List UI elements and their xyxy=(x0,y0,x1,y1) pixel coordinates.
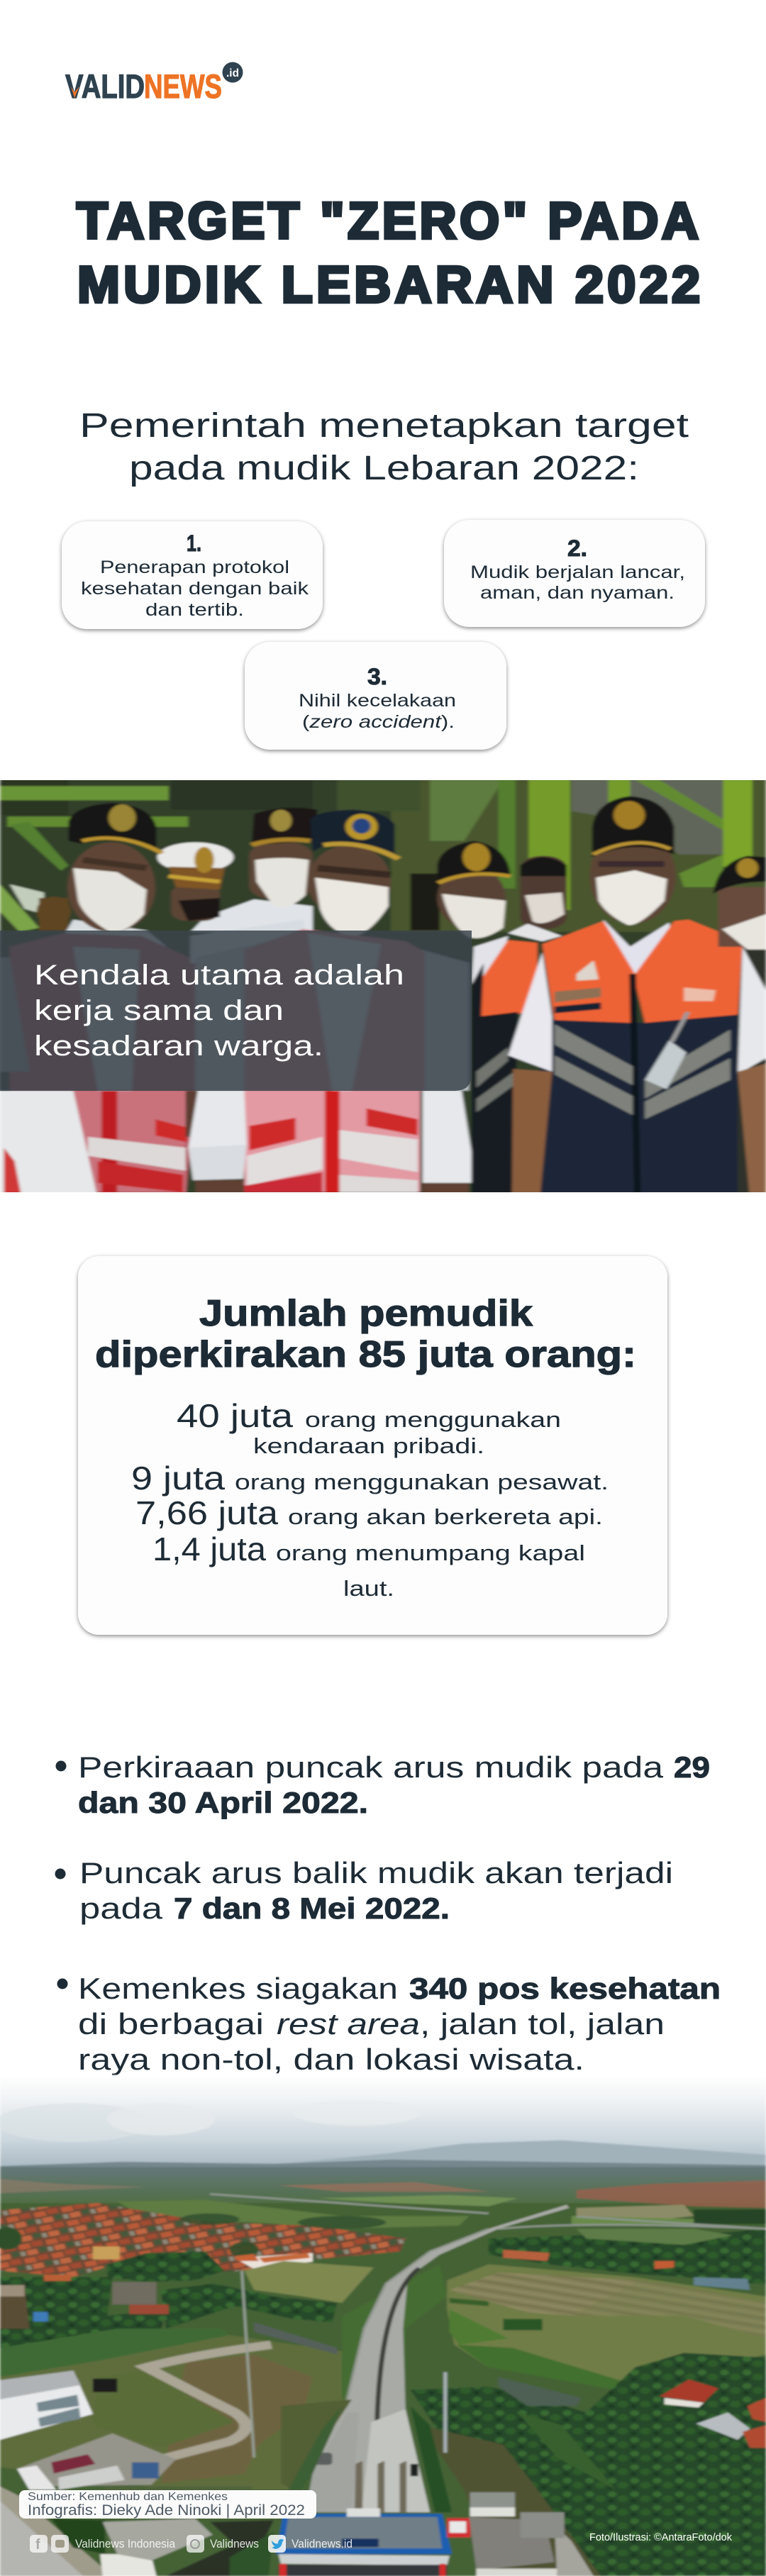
heading xyxy=(95,1293,636,1375)
white building xyxy=(0,2370,117,2440)
stat: 40 juta: 40 juta xyxy=(177,1397,293,1434)
social links: Validnews.id xyxy=(292,2537,353,2550)
bullet: puncak arus mudik: 29 xyxy=(674,1750,710,1784)
stat: 40 juta xyxy=(177,1397,561,1458)
icon: facebook: f xyxy=(35,2537,40,2553)
bullet: puncak arus balik: Puncak arus balik mudik akan terjadi xyxy=(79,1856,673,1889)
stat: 7,66 juta: orang akan berkereta api. xyxy=(288,1504,603,1529)
logo: Validnews.id: VALID xyxy=(65,67,145,105)
houses xyxy=(660,2380,718,2403)
stat: 1,4 juta: orang menumpang kapal xyxy=(276,1540,585,1565)
bullet: puncak arus balik xyxy=(55,1856,673,1925)
stat: 40 juta: orang menggunakan xyxy=(305,1407,561,1432)
back officer xyxy=(191,808,318,933)
lower left xyxy=(0,2487,274,2576)
subtitle xyxy=(79,407,689,487)
stat: 1,4 juta: laut. xyxy=(343,1576,394,1601)
panel: target 1: kesehatan dengan baik xyxy=(81,579,309,599)
stat: 9 juta xyxy=(131,1460,609,1497)
icon: instagram xyxy=(187,2535,204,2553)
bullet: pos kesehatan: raya non-tol, dan lokasi wisata. xyxy=(78,2043,584,2076)
stat: 1,4 juta: 1,4 juta xyxy=(152,1531,266,1567)
social links: Validnews Indonesia xyxy=(75,2537,175,2550)
bullet: puncak arus mudik: Perkiraaan puncak arus mudik pada xyxy=(78,1750,664,1784)
panel: target 1: dan tertib. xyxy=(145,600,244,620)
bullet: pos kesehatan xyxy=(57,1972,721,2076)
caption overlay xyxy=(0,931,472,1091)
panel: jumlah pemudik xyxy=(78,1256,667,1635)
vehicles xyxy=(17,2454,159,2489)
title: MUDIK LEBARAN 2022 xyxy=(77,257,700,313)
title xyxy=(77,193,700,313)
stat: 7,66 juta xyxy=(135,1494,603,1531)
forest lower right xyxy=(411,2353,766,2576)
stat: 40 juta: kendaraan pribadi. xyxy=(253,1433,484,1458)
white cap officer xyxy=(157,843,233,921)
logo: Validnews.id xyxy=(65,62,243,105)
subtitle: Pemerintah menetapkan target xyxy=(79,407,689,445)
credit box: Sumber: Kemenhub dan Kemenkes xyxy=(28,2491,228,2503)
bullet: pos kesehatan: rest area xyxy=(277,2007,420,2041)
logo: Validnews.id: NEWS xyxy=(144,67,222,105)
photo: aerial view of toll road xyxy=(0,2075,766,2576)
trees near village xyxy=(108,2251,225,2282)
caption overlay: Kendala utama adalah xyxy=(34,960,404,991)
main road xyxy=(210,2194,766,2512)
panel: target 3: (zero accident ). xyxy=(302,712,455,732)
panel: target 2 xyxy=(444,520,705,627)
caption overlay: kesadaran warga. xyxy=(34,1031,323,1062)
stat: 9 juta: 9 juta xyxy=(131,1460,225,1497)
heading: Jumlah pemudik xyxy=(199,1293,533,1334)
photo credit: Foto/Ilustrasi: ©AntaraFoto/dok xyxy=(589,2532,733,2543)
buildings right of plaza xyxy=(469,2492,594,2576)
lower grounds xyxy=(0,2335,347,2489)
bullet: pos kesehatan: 340 pos kesehatan xyxy=(409,1972,721,2005)
panel: target 3: Nihil kecelakaan xyxy=(299,691,456,711)
yellow green field xyxy=(244,2261,374,2303)
village xyxy=(0,2203,406,2277)
heading: diperkirakan 85 juta orang: xyxy=(95,1334,636,1375)
title: TARGET "ZERO" PADA xyxy=(77,193,699,250)
bullet: puncak arus balik: pada xyxy=(79,1892,163,1925)
panel: target 1: 1. xyxy=(187,531,201,556)
upper right tree belt xyxy=(489,2229,766,2284)
toll plaza xyxy=(276,2509,470,2576)
logo: Validnews.id: .id xyxy=(226,67,239,79)
kepala tengah xyxy=(191,810,399,963)
sheds xyxy=(33,2312,48,2321)
social links: Validnews xyxy=(210,2537,259,2550)
bullet: pos kesehatan: , jalan tol, jalan xyxy=(420,2007,665,2041)
social links xyxy=(30,2535,353,2553)
credit box: Infografis: Dieky Ade Ninoki | April 2022 xyxy=(28,2502,305,2519)
panel: target 2: 2. xyxy=(567,535,587,561)
bullet: puncak arus balik: 7 dan 8 Mei 2022. xyxy=(174,1892,450,1925)
right fields xyxy=(447,2264,766,2383)
panel: target 1: Penerapan protokol xyxy=(100,557,289,577)
subtitle: pada mudik Lebaran 2022: xyxy=(129,450,639,487)
panel: target 2: aman, dan nyaman. xyxy=(480,583,675,603)
caption overlay: kerja sama dan xyxy=(34,995,284,1026)
panel: target 2: Mudik berjalan lancar, xyxy=(470,562,685,582)
icon: twitter xyxy=(268,2535,286,2553)
bullet: pos kesehatan: Kemenkes siagakan xyxy=(78,1972,398,2005)
bullet: puncak arus mudik: dan 30 April 2022. xyxy=(78,1786,368,1819)
icon: facebook xyxy=(30,2535,48,2553)
icon: youtube xyxy=(51,2535,69,2553)
kepala kanan jauh xyxy=(714,856,766,950)
stat: 7,66 juta: 7,66 juta xyxy=(135,1494,278,1531)
kepala kanan xyxy=(589,796,676,925)
kepala kiri xyxy=(29,803,166,947)
stat: 9 juta: orang menggunakan pesawat. xyxy=(235,1470,609,1494)
credit box xyxy=(19,2490,316,2519)
bullet: pos kesehatan: di berbagai xyxy=(78,2007,264,2041)
officer KAI xyxy=(411,841,567,985)
stat: 1,4 juta xyxy=(152,1531,585,1601)
far land xyxy=(0,2167,766,2206)
bullet: puncak arus mudik xyxy=(55,1750,710,1819)
photo: officials in masks and vests xyxy=(0,773,766,1199)
panel: target 3 xyxy=(245,642,506,750)
panel: target 3: 3. xyxy=(367,664,387,689)
panel: target 1 xyxy=(62,521,323,629)
